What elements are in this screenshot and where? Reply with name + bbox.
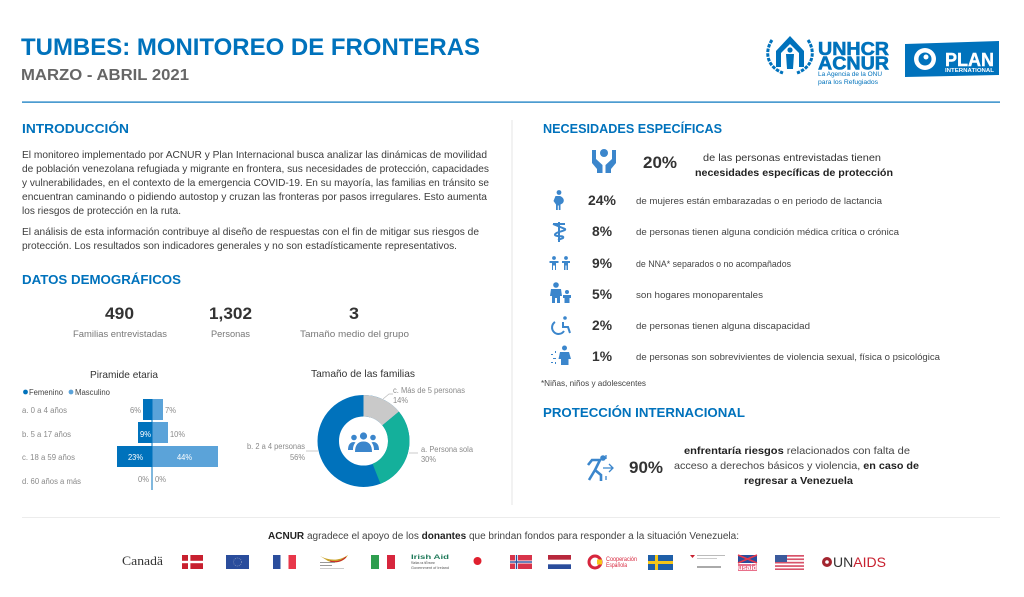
text block: intro paragraph 1: de población venezolana refugiada y migrante en frontera, sus necesidades de protección, capacidades — [22, 164, 489, 175]
logo: UNHCR ACNUR: para los Refugiados — [818, 79, 878, 86]
heading: introducción: INTRODUCCIÓN — [22, 121, 129, 136]
row: embarazadas: de mujeres están embarazadas o en periodo de lactancia — [636, 196, 883, 207]
row: discapacidad — [552, 316, 810, 334]
row: NNA separados: de NNA* separados o no acompañados — [636, 259, 791, 270]
icon: wheelchair — [552, 316, 570, 334]
row: violencia: de personas son sobrevivientes de violencia sexual, física o psicológica — [636, 352, 941, 363]
row: embarazadas: 24% — [588, 192, 617, 208]
logo: UNHCR ACNUR: La Agencia de la ONU — [818, 71, 882, 78]
chart: tamaño de las familias: 30% — [421, 455, 436, 464]
row: violencia — [551, 346, 941, 365]
chart: pirámide etaria: 7% — [165, 406, 176, 415]
flag: Norway — [510, 555, 532, 569]
logo: Germany — [320, 555, 348, 569]
flag: Sweden — [648, 555, 673, 570]
flag: Denmark — [182, 555, 203, 569]
row: embarazadas — [554, 190, 883, 210]
chart: tamaño de las familias: c. Más de 5 personas — [393, 386, 465, 395]
row: violencia: 1% — [592, 348, 613, 364]
chart title: Tamaño de las familias — [311, 368, 415, 380]
flag: Italy — [371, 555, 395, 569]
title: TUMBES: MONITOREO DE FRONTERAS — [21, 34, 480, 61]
stat: 20%: 20% — [643, 153, 677, 172]
heading: necesidades específicas: NECESIDADES ESPECÍFICAS — [543, 121, 722, 136]
text block: intro paragraph 2: El análisis de esta información contribuye al diseño de respuestas con el fin de mitigar sus riesgos de — [22, 227, 479, 238]
logo: Plan International: INTERNATIONAL — [945, 68, 994, 74]
chart: tamaño de las familias: b. 2 a 4 personas — [247, 442, 305, 451]
flag: Japan — [474, 557, 482, 565]
logo: UNHCR ACNUR: ACNUR — [818, 52, 889, 74]
text block: 90% description: acceso a derechos básicos y violencia, en caso de — [674, 461, 919, 472]
logo: Irish Aid: Rialtas na hÉireann — [411, 560, 435, 565]
icon: person with burst — [551, 346, 571, 365]
row: condición médica — [553, 222, 900, 242]
logo: UNHCR ACNUR: UNHCR — [818, 38, 889, 59]
stat: 90%: 90% — [629, 458, 663, 477]
row: NNA separados: 9% — [592, 255, 613, 271]
donut — [328, 406, 399, 476]
chart: pirámide etaria: 0% — [155, 475, 166, 484]
chart title: Piramide etaria — [90, 369, 158, 381]
logo: Plan International — [905, 41, 999, 77]
bars: masculino — [152, 399, 218, 467]
logo: Irish Aid: Irish Aid — [411, 554, 449, 561]
text block: 20% description: de las personas entrevistadas tienen — [703, 153, 881, 164]
stat: familias entrevistadas — [73, 304, 167, 340]
chart: pirámide etaria: d. 60 años a más — [22, 477, 81, 486]
text block: intro paragraph 2: protección. Los resultados son indicadores generales y no son estadísticamente representativos. — [22, 241, 457, 252]
stat: personas: Personas — [211, 329, 250, 340]
logo: UK aid and USAID: usaid — [738, 565, 757, 572]
logo: Switzerland — [690, 555, 725, 568]
stat: familias entrevistadas: 490 — [105, 304, 134, 323]
flag: United States — [775, 555, 804, 570]
row: condición médica: 8% — [592, 223, 613, 239]
icon: two children — [550, 256, 570, 270]
stat: familias entrevistadas: Familias entrevistadas — [73, 329, 167, 340]
stat: tamaño medio del grupo — [300, 304, 409, 340]
text block: 90% description: enfrentaría riesgos relacionados con falta de — [684, 446, 910, 457]
flag: France — [273, 555, 296, 569]
text block: 20% description — [695, 153, 893, 179]
panel: introducción — [22, 121, 489, 252]
legend: Masculino — [75, 388, 111, 397]
stat: tamaño medio del grupo: 3 — [349, 304, 359, 323]
text block: 90% description: regresar a Venezuela — [744, 476, 853, 487]
chart: pirámide etaria: 9% — [140, 430, 151, 439]
logo: UK aid and USAID — [738, 555, 757, 572]
heading: datos demográficos: DATOS DEMOGRÁFICOS — [22, 272, 181, 287]
chart: tamaño de las familias — [247, 368, 474, 476]
flag: Netherlands — [548, 555, 571, 569]
icon: people — [348, 432, 379, 452]
icon: parent and child — [550, 282, 571, 303]
legend: Femenino — [29, 388, 64, 397]
chart: pirámide etaria: b. 5 a 17 años — [22, 430, 71, 439]
row: NNA separados — [550, 255, 791, 271]
chart: pirámide etaria: 44% — [177, 453, 192, 462]
bars: femenino — [117, 399, 152, 467]
logo: Canada: Canadä — [122, 553, 163, 568]
text block: 20% description: necesidades específicas de protección — [695, 168, 893, 179]
row: discapacidad: de personas tienen alguna discapacidad — [636, 321, 810, 332]
stat: personas: 1,302 — [209, 304, 252, 323]
text block: intro paragraph 1: El monitoreo implementado por ACNUR y Plan Internacional busca analizar las dinámicas de movilidad — [22, 150, 487, 161]
logo: Cooperación Española — [589, 556, 637, 569]
row: condición médica: de personas tienen alguna condición médica crítica o crónica — [636, 227, 900, 238]
chart: tamaño de las familias: a. Persona sola — [421, 445, 474, 454]
chart: tamaño de las familias: 56% — [290, 453, 305, 462]
text block: intro paragraph 1: y vulnerabilidades, en el contexto de la emergencia COVID-19. En su mayoría, las familias en tránsito se — [22, 178, 489, 189]
subtitle: MARZO - ABRIL 2021 — [21, 67, 189, 84]
panel: necesidades específicas — [541, 121, 941, 388]
logo: Irish Aid — [411, 554, 449, 570]
chart: pirámide etaria: c. 18 a 59 años — [22, 453, 75, 462]
text block: intro paragraph 1: los riesgos de protección en la ruta. — [22, 206, 181, 217]
row: monoparentales: son hogares monoparentales — [636, 290, 763, 301]
row: discapacidad: 2% — [592, 317, 613, 333]
chart: pirámide etaria: 6% — [130, 406, 141, 415]
row: monoparentales — [550, 282, 763, 303]
heading: protección internacional: PROTECCIÓN INTERNACIONAL — [543, 405, 745, 420]
logo: UNHCR ACNUR — [768, 36, 889, 86]
text block: intro paragraph 2 — [22, 227, 479, 252]
chart: pirámide etaria: 23% — [128, 453, 143, 462]
chart: pirámide etaria: 10% — [170, 430, 185, 439]
logo: Cooperación Española: Española — [606, 563, 628, 569]
text block: 90% description — [674, 446, 919, 487]
footnote: *Niñas, niños y adolescentes — [541, 378, 646, 388]
panel: datos demográficos — [22, 272, 409, 340]
text block: intro paragraph 1: encuentran caminando o pidiendo autostop y cruzan las fronteras por pasos irregulares. Esto aumenta — [22, 192, 487, 203]
chart: pirámide etaria — [22, 369, 218, 490]
chart: pirámide etaria: 0% — [138, 475, 149, 484]
logo: Cooperación Española: Cooperación — [606, 557, 637, 563]
icon: medical staff — [553, 222, 565, 242]
icon: hands protecting person — [592, 149, 616, 173]
legend — [23, 388, 111, 397]
stat: tamaño medio del grupo: Tamaño medio del grupo — [300, 329, 409, 340]
icon: person running with arrow — [588, 455, 613, 481]
text block: intro paragraph 1 — [22, 150, 489, 217]
flag: European Union — [226, 555, 249, 569]
logo: Irish Aid: Government of Ireland — [411, 565, 449, 570]
donor logos — [122, 553, 886, 572]
row: monoparentales: 5% — [592, 286, 613, 302]
icon: pregnant woman — [554, 190, 564, 210]
chart: tamaño de las familias: 14% — [393, 396, 408, 405]
acknowledgement text: ACNUR agradece el apoyo de los donantes que brindan fondos para responder a la situación Venezuela: — [268, 531, 739, 542]
logo: Plan International: PLAN — [945, 50, 994, 70]
chart: pirámide etaria: a. 0 a 4 años — [22, 406, 67, 415]
stat: personas — [209, 304, 252, 340]
panel: protección internacional — [543, 405, 919, 487]
logo: UNAIDS: UNAIDS — [833, 554, 886, 570]
